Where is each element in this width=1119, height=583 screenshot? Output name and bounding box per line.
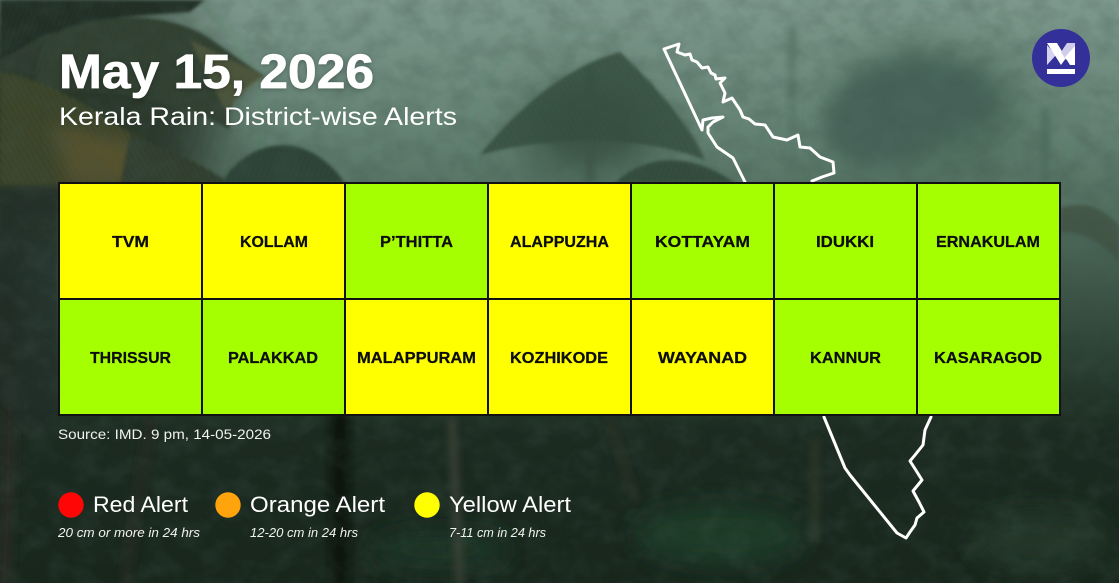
cell: Wayanad (631, 299, 774, 415)
cell: Kasaragod (917, 299, 1060, 415)
cell: Kozhikode (488, 299, 631, 415)
logo (1032, 29, 1090, 87)
alert table (59, 183, 1060, 415)
map outline of Kerala (664, 44, 931, 538)
cell: Kannur: KANNUR (810, 350, 881, 367)
cell: Alappuzha (488, 183, 631, 299)
subtitle: Kerala Rain: District-wise Alerts (59, 103, 457, 131)
legend: red alert: Red Alert (93, 492, 188, 517)
cell: Palakkad (202, 299, 345, 415)
title: May 15, 2026 (59, 46, 374, 99)
cell: Thrissur (59, 299, 202, 415)
cell: TVM (59, 183, 202, 299)
cell: P'thitta (345, 183, 488, 299)
legend: orange alert: Orange Alert (250, 492, 385, 517)
cell: Malappuram: MALAPPURAM (357, 350, 476, 367)
cell: Kollam: KOLLAM (240, 234, 308, 251)
cell: Ernakulam (917, 183, 1060, 299)
legend: orange alert (215, 492, 385, 540)
cell: Kottayam: KOTTAYAM (655, 234, 750, 251)
cell: Kottayam (631, 183, 774, 299)
legend: orange alert: 12-20 cm in 24 hrs (250, 525, 358, 540)
cell: P'thitta: P’THITTA (380, 234, 453, 251)
cell: Palakkad: PALAKKAD (228, 350, 318, 367)
palm fronds (0, 0, 1119, 440)
cell: TVM: TVM (112, 234, 149, 251)
cell: Kollam (202, 183, 345, 299)
cell: Ernakulam: ERNAKULAM (936, 234, 1040, 251)
cell: Malappuram (345, 299, 488, 415)
legend (57, 492, 571, 540)
cell: Alappuzha: ALAPPUZHA (510, 234, 609, 251)
source note: Source: IMD. 9 pm, 14-05-2026 (58, 426, 271, 442)
cell: Kozhikode: KOZHIKODE (510, 350, 608, 367)
legend: yellow alert: 7-11 cm in 24 hrs (449, 525, 546, 540)
cell: Thrissur: THRISSUR (90, 350, 171, 367)
legend: red alert: 20 cm or more in 24 hrs (57, 525, 201, 540)
legend: red alert (57, 492, 201, 540)
cell: Kannur (774, 299, 917, 415)
cell: Kasaragod: KASARAGOD (934, 350, 1042, 367)
cell: Idukki (774, 183, 917, 299)
cell: Idukki: IDUKKI (816, 234, 874, 251)
cell: Wayanad: WAYANAD (658, 350, 747, 367)
legend: yellow alert: Yellow Alert (449, 492, 571, 517)
legend: yellow alert (414, 492, 571, 540)
